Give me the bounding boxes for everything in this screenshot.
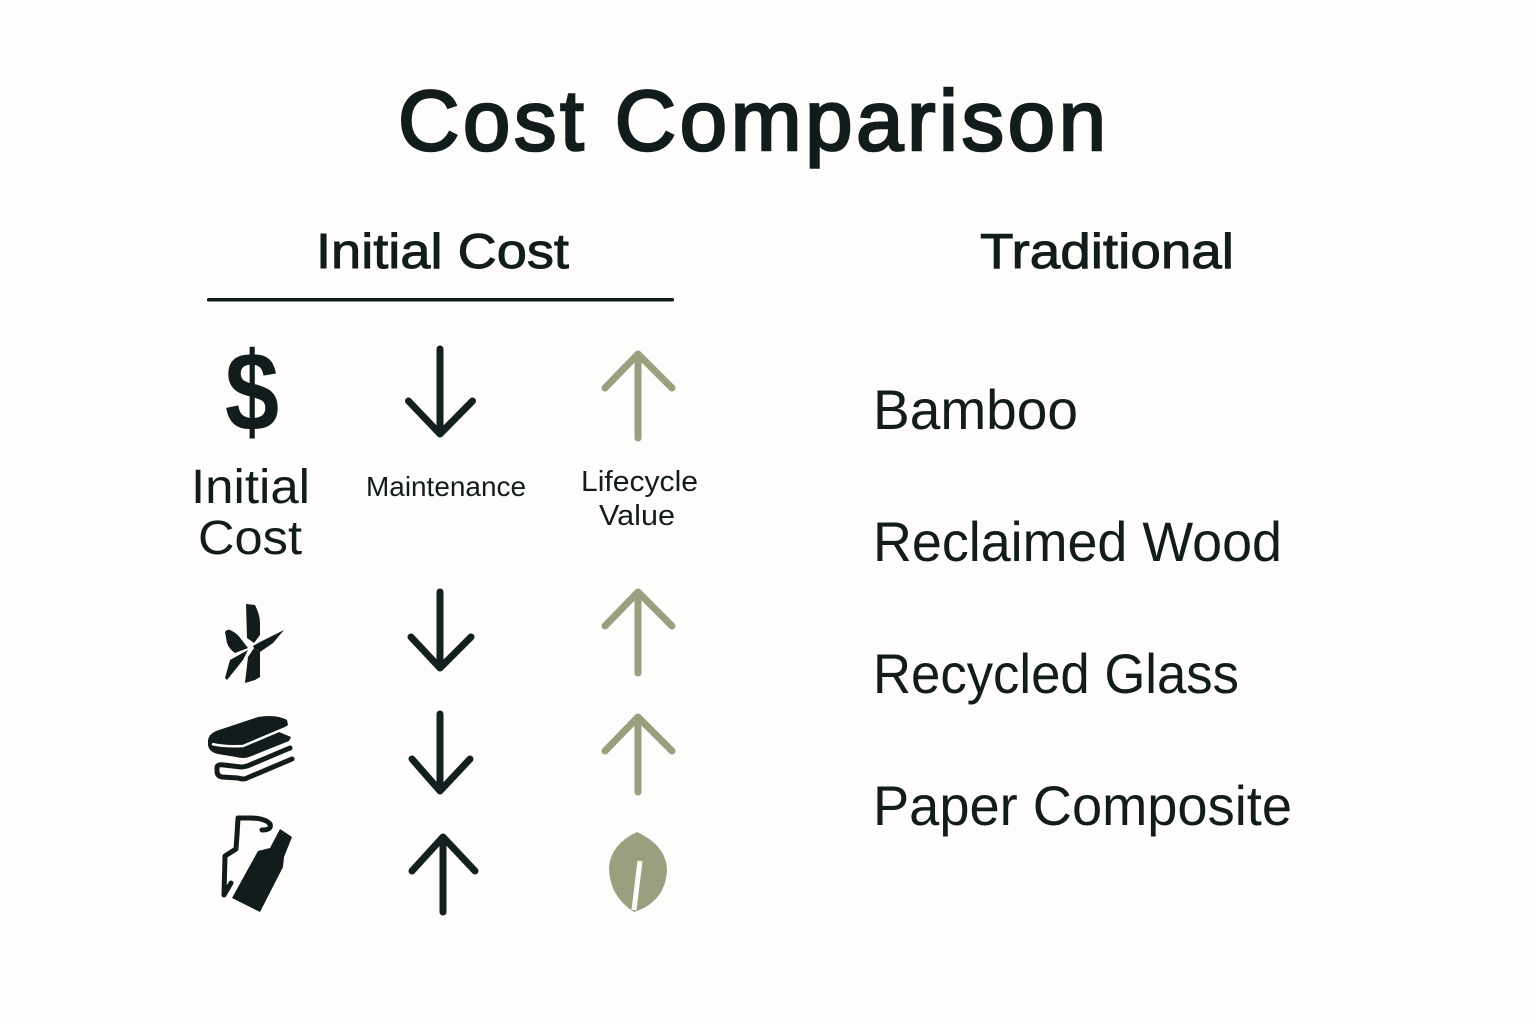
heading: initial cost: Initial Cost xyxy=(316,225,569,279)
material label: reclaimed wood: Reclaimed Wood xyxy=(873,510,1282,573)
icon: lifecycle up arrow, reclaimed wood xyxy=(605,717,672,792)
heading: traditional: Traditional xyxy=(980,225,1234,279)
title: Cost Comparison xyxy=(398,74,1106,169)
icon: maintenance up arrow, recycled glass xyxy=(412,837,475,912)
icon: recycled glass bottles xyxy=(224,818,292,912)
material label: bamboo: Bamboo xyxy=(873,378,1078,441)
column label: maintenance: Maintenance xyxy=(366,471,526,502)
icon: bamboo plant xyxy=(225,604,284,683)
icon: maintenance down arrow, bamboo xyxy=(411,592,471,668)
column label: lifecycle value xyxy=(581,466,698,532)
material label: recycled glass: Recycled Glass xyxy=(873,642,1239,705)
icon: maintenance down arrow, reclaimed wood xyxy=(412,714,470,791)
icon: lifecycle up arrow, header row xyxy=(605,354,672,438)
icon: dollar sign: $ xyxy=(225,330,279,455)
icon: maintenance down arrow, header row xyxy=(408,349,472,434)
column label: initial cost: Cost xyxy=(198,512,302,565)
icon: reclaimed wood planks xyxy=(208,716,292,779)
material label: paper composite: Paper Composite xyxy=(873,774,1292,837)
column label: initial cost xyxy=(191,461,310,565)
column label: initial cost: Initial xyxy=(191,461,310,514)
heading underline xyxy=(207,298,674,302)
column label: lifecycle value: Lifecycle xyxy=(581,466,698,498)
icon: lifecycle up arrow, bamboo xyxy=(605,592,672,673)
column label: lifecycle value: Value xyxy=(599,500,675,532)
icon: leaf xyxy=(609,832,667,912)
